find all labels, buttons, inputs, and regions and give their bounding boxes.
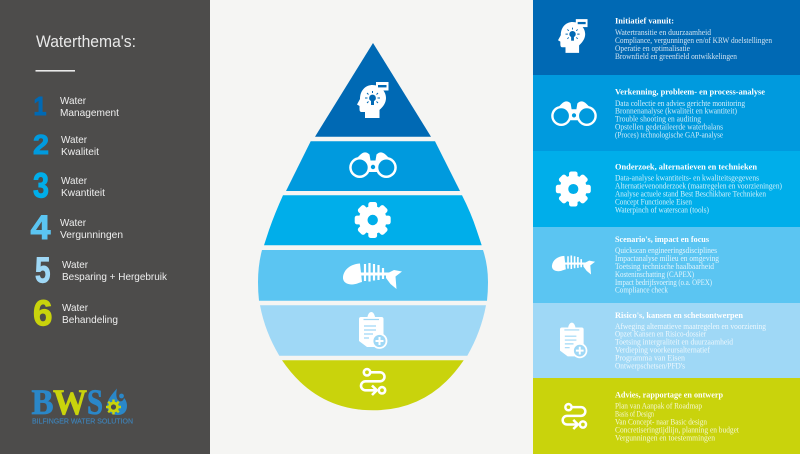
theme 1: Management bbox=[60, 107, 119, 119]
panel: Advies: Van Concept- naar Basic design bbox=[615, 417, 707, 426]
panel: Risico's: Opzet Kansen en Risico-dossier bbox=[615, 330, 706, 339]
panel: Onderzoek: Analyse actuele stand Best Beschikbare Technieken bbox=[615, 190, 766, 199]
panel: Advies bbox=[533, 378, 800, 454]
icon: binoculars bbox=[551, 101, 597, 126]
panel: Scenario's: Scenario's, impact en focus bbox=[615, 235, 709, 244]
panel: Verkenning: Data collectie en advies gerichte monitoring bbox=[615, 99, 745, 108]
panel: Verkenning: Trouble shooting en auditing bbox=[615, 115, 701, 124]
theme 1: 1 bbox=[34, 91, 46, 121]
panel: Verkenning bbox=[533, 75, 800, 151]
theme 4 bbox=[30, 209, 123, 247]
panel: Advies: Plan van Aanpak of Roadmap bbox=[615, 401, 702, 410]
panel: Verkenning: Opstellen gedetaileerde waterbalans bbox=[615, 123, 723, 132]
panel: Scenario's: Kosteninschatting (CAPEX) bbox=[615, 270, 694, 279]
panel: Onderzoek: Onderzoek, alternatieven en technieken bbox=[615, 162, 757, 172]
panel: Initiatief vanuit: Compliance, vergunningen en/of KRW doelstellingen bbox=[615, 36, 772, 45]
theme 4: Water bbox=[60, 217, 86, 229]
panel: Verkenning: (Proces) technologische GAP-analyse bbox=[615, 131, 723, 140]
panel: Onderzoek: Waterpinch of waterscan (tools) bbox=[615, 206, 709, 215]
drop slice 1 bbox=[315, 43, 431, 137]
panel: Onderzoek: Data-analyse kwantiteits- en kwaliteitsgegevens bbox=[615, 174, 759, 183]
panel: Risico's bbox=[533, 303, 800, 378]
panel: Advies: Basis of Design bbox=[615, 409, 654, 418]
theme 1 bbox=[34, 91, 119, 121]
panel: Onderzoek: Concept Functionele Eisen bbox=[615, 198, 692, 207]
theme 2: Kwaliteit bbox=[61, 146, 99, 158]
heading underline bbox=[36, 70, 75, 72]
panel: Initiatief vanuit: Initiatief vanuit: bbox=[615, 16, 674, 26]
theme 2 bbox=[33, 129, 99, 160]
drop slice 6 bbox=[282, 360, 464, 410]
theme 2: 2 bbox=[33, 129, 49, 160]
icon: head with light bulb bbox=[558, 19, 588, 53]
logo: BWS: BILFINGER WATER SOLUTION bbox=[32, 416, 133, 426]
icon: gear bbox=[556, 172, 591, 206]
panel: Advies: Concretiseringtijdlijn, planning en budget bbox=[615, 425, 740, 434]
panel: Risico's: Programma van Eisen bbox=[615, 353, 685, 362]
icon: clipboard bbox=[560, 323, 587, 357]
icon: fish bone bbox=[552, 256, 595, 274]
panel: Initiatief vanuit bbox=[533, 0, 800, 75]
theme 6: 6 bbox=[33, 292, 52, 334]
panel: Scenario's: Compliance check bbox=[615, 286, 668, 295]
theme 3: Kwantiteit bbox=[61, 187, 105, 199]
panel: Advies: Vergunningen en toestemmingen bbox=[615, 433, 715, 442]
theme 6: Behandeling bbox=[62, 314, 118, 326]
theme 1: Water bbox=[60, 95, 86, 107]
panel: Risico's: Afweging alternatieve maatregelen en voorziening bbox=[615, 322, 766, 331]
theme 4: 4 bbox=[30, 209, 51, 247]
drop slice 2 bbox=[286, 141, 460, 191]
panel: Scenario's: Impact bedrijfsvoering (o.a. OPEX) bbox=[615, 278, 712, 287]
panel: Risico's: Ontwerpschetsen/PFD's bbox=[615, 361, 685, 370]
panel: Scenario's: Toetsing technische haalbaarheid bbox=[615, 262, 714, 271]
theme 3: 3 bbox=[33, 166, 49, 206]
theme 5: Water bbox=[62, 259, 88, 271]
panel: Risico's: Risico's, kansen en schetsontwerpen bbox=[615, 311, 743, 320]
theme 5 bbox=[35, 250, 168, 290]
drop slice 4 bbox=[258, 250, 488, 301]
panel: Verkenning: Verkenning, probleem- en process-analyse bbox=[615, 88, 765, 96]
theme 6: Water bbox=[62, 302, 88, 314]
heading: Waterthema's: Waterthema's: bbox=[36, 32, 136, 51]
panel: Initiatief vanuit: Brownfield en greenfield ontwikkelingen bbox=[615, 52, 737, 61]
water drop diagram bbox=[258, 43, 488, 410]
logo: BWS: S bbox=[87, 382, 103, 422]
theme 6 bbox=[33, 292, 118, 334]
logo: BWS: W bbox=[53, 382, 87, 422]
panel: Onderzoek: Alternatievenonderzoek (maatregelen en voorzieningen) bbox=[615, 182, 782, 191]
panel: Scenario's bbox=[533, 227, 800, 303]
logo: BWS bbox=[32, 382, 133, 426]
panel: Risico's: Toetsing intergraliteit en duurzaamheid bbox=[615, 338, 733, 347]
center background bbox=[210, 0, 533, 454]
drop slice 3 bbox=[264, 195, 482, 245]
panel: Initiatief vanuit: Operatie en optimalisatie bbox=[615, 44, 690, 53]
panel: Initiatief vanuit: Watertransitie en duurzaamheid bbox=[615, 28, 711, 37]
icon: route bbox=[563, 404, 586, 429]
theme 3: Water bbox=[61, 175, 87, 187]
panel: Onderzoek bbox=[533, 151, 800, 227]
drop slice 5 bbox=[260, 305, 486, 356]
panel: Risico's: Verdieping voorkeursalternatief bbox=[615, 345, 710, 354]
theme 4: Vergunningen bbox=[60, 229, 123, 241]
panel: Scenario's: Quickscan engineeringsdisciplines bbox=[615, 246, 717, 255]
theme 5: 5 bbox=[35, 250, 50, 290]
panel: Advies: Advies, rapportage en ontwerp bbox=[615, 390, 723, 400]
theme 3 bbox=[33, 166, 105, 206]
panel: Verkenning: Bronnenanalyse (kwaliteit en kwantiteit) bbox=[615, 107, 737, 116]
theme 5: Besparing + Hergebruik bbox=[62, 271, 168, 283]
panel: Scenario's: Impactanalyse milieu en omgeving bbox=[615, 254, 719, 263]
logo: BWS: B bbox=[32, 382, 54, 422]
panel: themes sidebar bbox=[0, 0, 210, 454]
theme 2: Water bbox=[61, 134, 87, 146]
